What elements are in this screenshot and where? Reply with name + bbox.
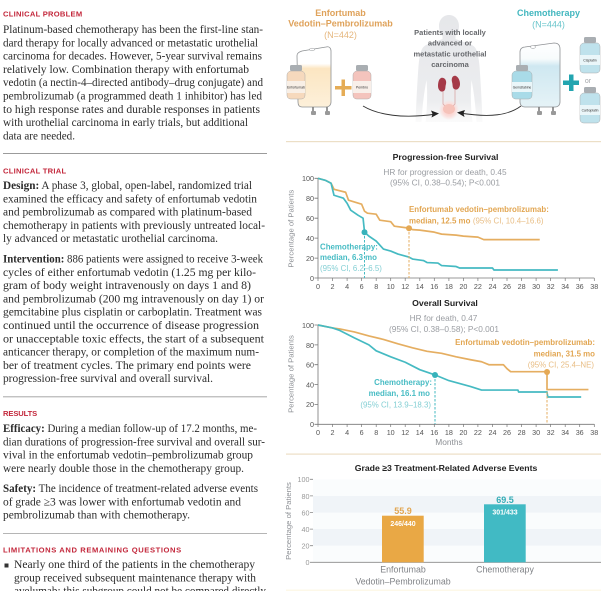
heading: enfortumab group (288, 8, 393, 40)
median marker: PFS chemotherapy (362, 229, 368, 278)
axis: OS x ticks: 4 (345, 428, 349, 437)
axis: PFS x ticks: 0 (316, 282, 320, 291)
panel: limitations and remaining questions (3, 545, 266, 591)
heading: OS: Overall Survival (412, 298, 478, 308)
axis: PFS x ticks: 28 (518, 282, 526, 291)
axis: adverse events y ticks: 100 (298, 475, 310, 484)
axis: PFS y ticks: 60 (306, 214, 314, 223)
axis: PFS x ticks: 4 (345, 282, 349, 291)
text block: design: and pembrolizumab as compared with platinum-based (3, 207, 252, 219)
text block: efficacy: were nearly double those in the chemotherapy group. (3, 463, 244, 475)
axis: OS x ticks: 6 (360, 428, 364, 437)
axis: OS y ticks: 80 (306, 341, 314, 350)
icon: cisplatin vial (580, 37, 600, 73)
axis: PFS x ticks: 14 (416, 282, 424, 291)
bullet (4, 564, 8, 568)
icon: carboplatin vial (580, 87, 600, 123)
text: OS hazard ratio: (95% CI, 0.38–0.58); P<0.001 (389, 324, 499, 334)
axis: PFS x ticks: 22 (474, 282, 482, 291)
axis: PFS x ticks: 32 (547, 282, 555, 291)
heading: enfortumab group: Vedotin–Pembrolizumab (288, 18, 393, 28)
panel: adverse events chart (284, 463, 601, 586)
text block: efficacy (3, 423, 265, 475)
text block: design: chemotherapy in patients with previously untreated local- (3, 220, 265, 232)
axis: PFS y ticks: 40 (306, 234, 314, 243)
icon: kidneys and bladder (438, 76, 460, 120)
axis: OS x ticks: 0 (316, 428, 320, 437)
text block: clinical problem: carcinoma for decades. However, 5-year survival remains (3, 51, 263, 63)
axis: PFS x ticks: 26 (503, 282, 511, 291)
text block: intervention: progression-free survival and overall survival. (3, 373, 213, 385)
axis: OS x ticks: 30 (532, 428, 540, 437)
label: OS enfortumab median: (95% CI, 25.4–NE) (528, 360, 594, 370)
axis: PFS y ticks: 100 (302, 174, 314, 183)
text: OS hazard ratio (389, 313, 499, 334)
text block: clinical problem: dard therapy for locally advanced or metastatic urothelial (3, 37, 258, 49)
axis: OS x ticks: 20 (459, 428, 467, 437)
text block: intervention: ber of treatment cycles. The primary end points were (3, 360, 251, 372)
axis: adverse events y ticks: 60 (302, 508, 310, 518)
icon: pembrolizumab vial: Pembro (356, 86, 368, 90)
bar: chemotherapy: 301/433 (492, 510, 518, 516)
axis: OS y ticks: 100 (302, 321, 314, 330)
text: PFS hazard ratio: HR for progression or death, 0.45 (383, 167, 507, 177)
axis: PFS x ticks: 24 (488, 282, 496, 291)
axis: OS x ticks: 26 (503, 428, 511, 437)
axis: PFS x ticks: 30 (532, 282, 540, 291)
text: patients label: metastatic urothelial (414, 50, 486, 58)
bands: chart background (313, 479, 601, 562)
panel: overall survival chart (286, 298, 598, 447)
axis: adverse events y ticks: 40 (302, 525, 310, 534)
label: PFS enfortumab median (409, 205, 549, 226)
axis: OS y label: Percentage of Patients (286, 335, 296, 413)
curve: PFS chemotherapy (318, 178, 558, 270)
axis: OS x ticks: 18 (445, 428, 453, 437)
bar: chemotherapy (484, 495, 526, 562)
heading: chemotherapy group (517, 8, 580, 30)
text block: intervention: cycles of either enfortumab vedotin (1.25 mg per kilo- (3, 267, 256, 279)
label: OS chemotherapy median: (95% CI, 13.9–18.3) (360, 400, 431, 410)
arrow: right treatment to patient (457, 106, 521, 117)
text block: limitations (14, 559, 266, 591)
heading: clinical trial: CLINICAL TRIAL (3, 166, 67, 175)
median marker: OS enfortumab (544, 369, 550, 424)
axis: OS x ticks: 32 (547, 428, 555, 437)
axis: OS x ticks: 16 (430, 428, 438, 437)
axis: OS x ticks (316, 424, 598, 437)
text: patients label: Patients with locally (414, 28, 487, 37)
axis: PFS y ticks: 20 (306, 254, 314, 263)
axis: OS y ticks: 20 (306, 400, 314, 409)
panel: clinical trial (3, 166, 265, 385)
curve: OS enfortumab vedotin–pembrolizumab (318, 325, 588, 390)
text block: intervention: Intervention: 886 patients were assigned to receive 3-week (3, 254, 263, 266)
text block: clinical problem: vedotin (a nectin-4–directed antibody–drug conjugate) and (3, 77, 263, 89)
heading: adverse events: Grade ≥3 Treatment-Related Adverse Events (355, 463, 537, 473)
heading: chemotherapy group: (N=444) (532, 20, 565, 30)
icon: enfortumab vial: Enfortumab (287, 86, 305, 90)
icon: plus teal (563, 74, 579, 91)
text block: design: examined the efficacy and safety of enfortumab vedotin (3, 193, 257, 205)
icon: cisplatin vial: Cisplatin (583, 58, 597, 62)
axis: PFS x ticks: 18 (445, 282, 453, 291)
heading: limitations: LIMITATIONS AND REMAINING QUESTIONS (3, 545, 182, 554)
axis: OS x ticks: 10 (387, 428, 395, 437)
label: OS chemotherapy median (360, 378, 432, 410)
text block: design: Design: A phase 3, global, open-label, randomized trial (3, 180, 252, 192)
curve: OS chemotherapy (318, 325, 581, 397)
label: PFS chemotherapy median: Chemotherapy: (320, 243, 378, 252)
text: patients label: carcinoma (431, 60, 470, 69)
text block: safety: Safety: The incidence of treatment-related adverse events (3, 483, 259, 495)
axis: PFS x ticks: 16 (430, 282, 438, 291)
text block: limitations: Nearly one third of the patients in the chemotherapy (14, 559, 255, 571)
text block: efficacy: dian durations of progression-free survival and overall sur- (3, 436, 265, 448)
bar: enfortumab vedotin–pembrolizumab: 55.9 (394, 506, 412, 516)
text block: intervention: continued until the occurrence of disease progression (3, 320, 259, 332)
axis: PFS y ticks: 80 (306, 194, 314, 203)
label: OS enfortumab median: median, 31.5 mo (534, 350, 595, 358)
text block: clinical problem: to high response rates and durable responses in patients (3, 104, 261, 116)
icon: gemcitabine vial (512, 65, 532, 99)
heading: enfortumab group: (N=442) (324, 30, 357, 40)
label: OS chemotherapy median: Chemotherapy: (374, 378, 432, 387)
label: OS chemotherapy median: median, 16.1 mo (369, 389, 430, 398)
panel: progression-free survival chart (286, 152, 598, 291)
icon: carboplatin vial: Carboplatin (582, 108, 599, 112)
text block: clinical problem: pembrolizumab (a programmed death 1 inhibitor) has led (3, 90, 262, 102)
text block: safety: of grade ≥3 was lower with enfortumab vedotin and (3, 496, 241, 508)
panel: trial illustration (287, 8, 600, 123)
icon: enfortumab vial (287, 65, 305, 99)
text block: clinical problem: relatively low. Combination therapy with enfortumab (3, 64, 249, 76)
icon: plus orange (335, 80, 352, 96)
axis: PFS x ticks: 20 (459, 282, 467, 291)
text: patients label (414, 28, 487, 69)
heading: PFS: Progression-free Survival (393, 152, 498, 162)
bar: enfortumab vedotin–pembrolizumab (382, 506, 424, 562)
axis: OS x ticks: 2 (330, 428, 334, 437)
bar: enfortumab vedotin–pembrolizumab: 246/440 (390, 521, 416, 528)
text block: intervention: anticancer therapy, or completion of the maximum num- (3, 346, 259, 358)
axis: PFS x ticks: 8 (374, 282, 378, 291)
axis: OS x ticks: 12 (401, 428, 409, 437)
axis: OS x ticks: 38 (590, 428, 598, 437)
axis: months label: Months (435, 437, 463, 447)
icon: blue IV bag (520, 43, 560, 115)
axis: OS y ticks: 0 (310, 420, 314, 429)
axis: OS x ticks: 14 (416, 428, 424, 437)
bar: chemotherapy: 69.5 (496, 495, 514, 505)
axis: OS x ticks: 24 (488, 428, 496, 437)
axis: OS y ticks (302, 321, 594, 429)
axis: adverse events y ticks: 0 (306, 558, 310, 567)
text: OS hazard ratio: HR for death, 0.47 (410, 313, 478, 323)
text block: clinical problem: with urothelial carcinoma in early trials, but additional (3, 117, 248, 129)
label: PFS enfortumab median: Enfortumab vedotin–pembrolizumab: (409, 205, 549, 214)
label: PFS chemotherapy median: median, 6.3 mo (320, 253, 377, 262)
axis: adverse events y ticks (298, 475, 601, 567)
axis: PFS x ticks: 34 (561, 282, 569, 291)
axis: adverse events y ticks: 80 (302, 492, 310, 501)
axis: OS y ticks: 60 (306, 360, 314, 370)
heading: chemotherapy group: Chemotherapy (517, 8, 580, 18)
text block: intervention: or unacceptable toxic effects, the start of a subsequent (3, 333, 265, 345)
text: or: or (585, 78, 592, 85)
arrow: left treatment to patient (363, 106, 439, 118)
label: bar categories: Enfortumab (380, 564, 426, 574)
axis: PFS x ticks: 10 (387, 282, 395, 291)
text block: intervention (3, 254, 265, 385)
text block: clinical problem (3, 24, 263, 142)
axis: PFS x ticks: 12 (401, 282, 409, 291)
heading: clinical problem: CLINICAL PROBLEM (3, 10, 83, 18)
text: PFS hazard ratio: (95% CI, 0.38–0.54); P<0.001 (390, 178, 500, 188)
axis: adverse events y ticks: 20 (302, 542, 310, 550)
label: OS enfortumab median: Enfortumab vedotin–pembrolizumab: (455, 338, 595, 347)
axis: OS x ticks: 22 (474, 428, 482, 437)
icon: pembrolizumab vial (353, 65, 371, 99)
text block: efficacy: Efficacy: During a median follow-up of 17.2 months, me- (3, 423, 257, 435)
text block: intervention: gemcitabine plus cisplatin or carboplatin. Treatment was (3, 307, 263, 319)
text block: clinical problem: Platinum-based chemotherapy has been the first-line stan- (3, 24, 263, 36)
panel: clinical problem (3, 10, 263, 142)
axis: PFS x ticks: 36 (576, 282, 584, 291)
axis: PFS x ticks (316, 278, 598, 291)
axis: OS x ticks: 28 (518, 428, 526, 437)
heading: results: RESULTS (3, 409, 38, 418)
axis: PFS y ticks (302, 174, 594, 283)
text block: safety: pembrolizumab than with chemotherapy. (3, 510, 190, 522)
heading: enfortumab group: Enfortumab (315, 8, 366, 18)
curve: PFS enfortumab vedotin–pembrolizumab (318, 178, 540, 240)
label: bar categories: Vedotin–Pembrolizumab (355, 576, 451, 586)
label: bar categories: Chemotherapy (476, 564, 534, 574)
icon: gemcitabine vial: Gemcitabine (513, 86, 531, 90)
text block: limitations: group received subsequent maintenance therapy with (14, 572, 256, 584)
text: patients label: advanced or (428, 38, 472, 48)
label: bar categories (355, 564, 534, 586)
label: OS enfortumab median (455, 338, 595, 370)
text block: efficacy: vival in the enfortumab vedotin–pembrolizumab group (3, 450, 253, 462)
text block: design (3, 180, 265, 245)
panel: results (3, 409, 265, 522)
axis: PFS x ticks: 6 (360, 282, 364, 291)
text block: intervention: and pembrolizumab (200 mg intravenously on day 1) or (3, 293, 264, 305)
axis: OS x ticks: 34 (561, 428, 569, 437)
text: PFS hazard ratio (383, 167, 507, 188)
axis: PFS x ticks: 2 (330, 282, 334, 291)
label: PFS chemotherapy median: (95% CI, 6.2–6.5) (320, 264, 382, 273)
label: PFS enfortumab median: median, 12.5 mo (95% CI, 10.4–16.6) (409, 216, 544, 226)
axis: OS x ticks: 36 (576, 428, 584, 437)
median marker: PFS enfortumab (406, 225, 412, 278)
text block: safety (3, 483, 259, 522)
axis: PFS y ticks: 0 (310, 274, 314, 283)
text block: clinical problem: data are needed. (3, 130, 75, 142)
axis: PFS x ticks: 38 (590, 282, 598, 291)
icon: patient silhouette (416, 15, 482, 122)
median marker: OS chemotherapy (432, 372, 438, 424)
axis: OS x ticks: 8 (374, 428, 378, 437)
axis: adverse events y label: Percentage of Patients (284, 482, 293, 560)
label: PFS chemotherapy median (320, 243, 382, 273)
axis: PFS y label: Percentage of Patients (286, 190, 296, 268)
icon: orange IV bag (297, 47, 331, 115)
text block: intervention: gram of body weight intravenously on days 1 and 8) (3, 280, 251, 292)
text block: design: ly advanced or metastatic urothelial carcinoma. (3, 233, 218, 245)
axis: OS y ticks: 40 (306, 380, 314, 390)
